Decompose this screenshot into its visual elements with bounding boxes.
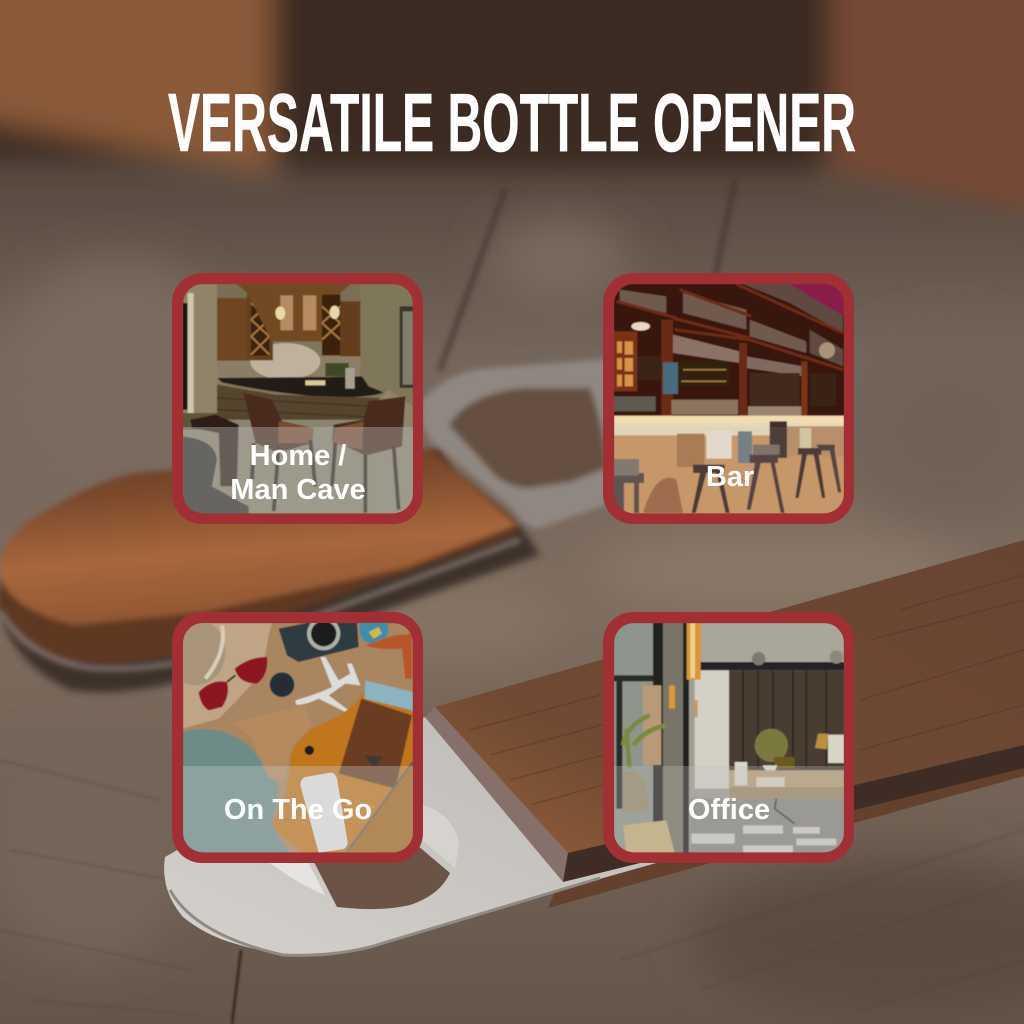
phone (300, 773, 348, 853)
upper bottle opener (out of focus) (0, 358, 625, 692)
label: Office (688, 794, 770, 826)
photo: bar interior (614, 284, 844, 514)
label strip (614, 766, 844, 853)
wooden handle (435, 540, 1024, 853)
opening bevel (270, 862, 325, 895)
metal head (421, 358, 625, 528)
bottle opening (313, 845, 450, 909)
card: Home / Man Cave (172, 273, 423, 524)
label strip (183, 766, 413, 853)
label strip (614, 427, 844, 514)
label: Home / (250, 440, 346, 472)
handle side (563, 745, 1024, 882)
card: Bar (603, 273, 854, 524)
label strip (183, 427, 413, 514)
photo: travel flat lay (183, 623, 413, 852)
wood grain (470, 575, 1024, 805)
wooden handle (0, 448, 516, 663)
metal head (164, 717, 660, 955)
photo: office interior (614, 623, 844, 854)
grey lip (0, 540, 520, 669)
bottle opening (449, 388, 606, 488)
card: On The Go (165, 612, 423, 863)
label: Bar (706, 461, 754, 493)
handle end edge (425, 707, 568, 882)
card: Office (603, 612, 854, 863)
under plate (548, 748, 1024, 908)
lower bottle opener (in focus) (164, 540, 1024, 955)
label: On The Go (224, 794, 372, 826)
shadow (0, 525, 540, 692)
photo: home bar room (183, 284, 413, 515)
card: Home / Man Cave: Man Cave (230, 474, 366, 506)
